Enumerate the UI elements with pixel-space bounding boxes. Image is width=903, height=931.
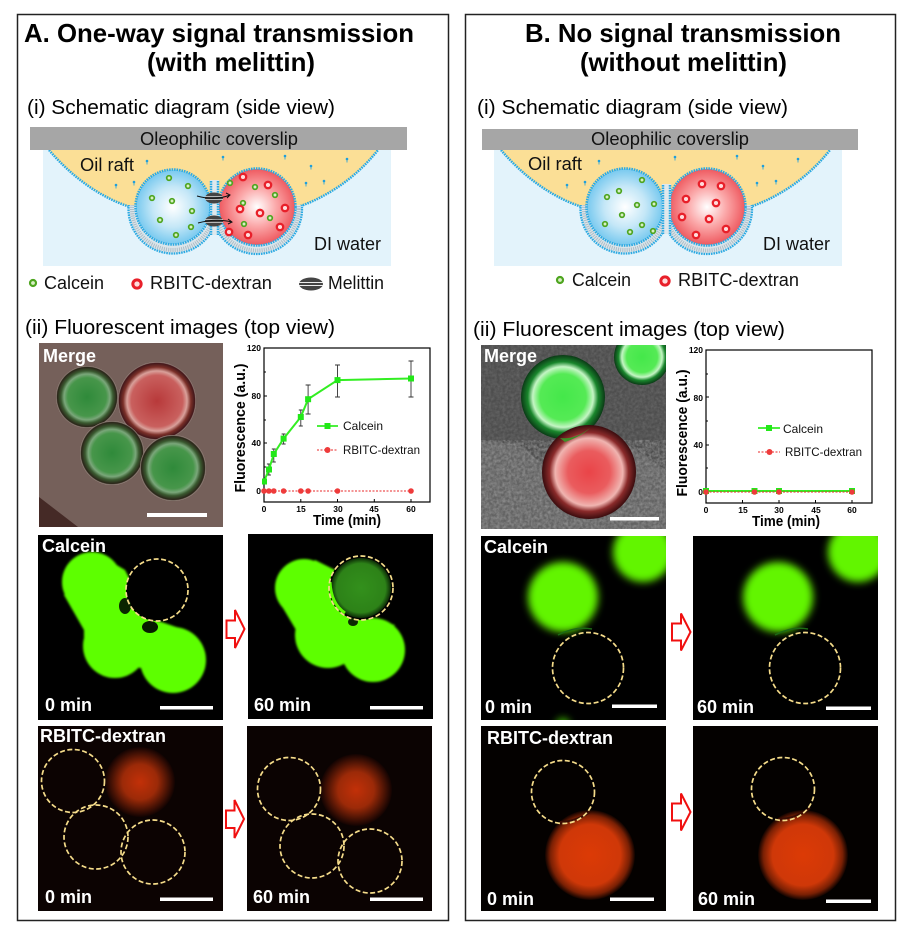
panel B fluorescent heading: (ii) Fluorescent images (top view) bbox=[473, 318, 785, 341]
scale bar bbox=[370, 898, 423, 901]
y tick labels: 40 bbox=[252, 438, 261, 448]
oil tadpoles bbox=[566, 155, 799, 188]
dashed outline bbox=[752, 758, 814, 820]
schematic labels: Oleophilic coverslip bbox=[591, 129, 749, 149]
chart B: fluorescence over time bbox=[674, 345, 872, 530]
merge label: Merge bbox=[484, 346, 537, 366]
chart legend bbox=[758, 422, 862, 459]
RBITC dots bbox=[226, 174, 288, 238]
chart legend: RBITC-dextran bbox=[785, 445, 862, 459]
time label: 60 min bbox=[254, 695, 311, 715]
y tick labels: 120 bbox=[689, 345, 703, 355]
axis titles: Fluorescence (a.u.) bbox=[232, 364, 249, 492]
time label: 0 min bbox=[485, 697, 532, 717]
scale bar bbox=[160, 706, 213, 710]
axis titles: Fluorescence (a.u.) bbox=[674, 370, 691, 496]
melittin pores and arrows bbox=[197, 192, 232, 226]
panel B title bbox=[525, 18, 841, 77]
axis titles: Time (min) bbox=[752, 513, 820, 530]
label: RBITC-dextran bbox=[487, 728, 613, 748]
time label: 60 min bbox=[697, 697, 754, 717]
axis titles bbox=[232, 364, 381, 529]
panel A legend: Melittin bbox=[328, 273, 384, 293]
merge image B bbox=[481, 329, 670, 529]
error bars bbox=[267, 361, 414, 475]
calcein 0 min image A bbox=[38, 535, 223, 720]
axis titles: Time (min) bbox=[313, 512, 381, 529]
y tick labels: 40 bbox=[694, 440, 703, 450]
y tick labels: 80 bbox=[252, 391, 261, 401]
panel A legend: RBITC-dextran bbox=[150, 273, 272, 293]
scale bar bbox=[610, 517, 659, 520]
label: Calcein bbox=[42, 536, 106, 556]
schematic labels: DI water bbox=[763, 234, 830, 254]
scale bar bbox=[147, 513, 207, 517]
x tick labels: 60 bbox=[847, 505, 857, 515]
label: Calcein bbox=[484, 537, 548, 557]
panel A title: (with melittin) bbox=[147, 47, 315, 77]
calcein 0 min image B bbox=[481, 536, 666, 720]
RBITC 60 min image A bbox=[247, 726, 432, 911]
dashed outline bbox=[770, 632, 840, 704]
time label: 0 min bbox=[45, 887, 92, 907]
chart legend: RBITC-dextran bbox=[343, 443, 420, 457]
time label: 0 min bbox=[487, 889, 534, 909]
y tick labels: 120 bbox=[247, 343, 261, 353]
y tick labels bbox=[689, 345, 703, 497]
y tick labels: 0 bbox=[256, 486, 261, 496]
dashed outline bbox=[552, 632, 624, 704]
arrow B calcein bbox=[672, 614, 690, 650]
panel B title: (without melittin) bbox=[580, 47, 787, 77]
x tick labels: 45 bbox=[369, 504, 379, 514]
RBITC 60 min image B bbox=[693, 726, 878, 911]
time label: 60 min bbox=[253, 887, 310, 907]
panel A schematic diagram bbox=[30, 127, 407, 266]
x tick labels: 30 bbox=[774, 505, 784, 515]
panel A schematic heading: (i) Schematic diagram (side view) bbox=[27, 96, 335, 119]
RBITC series bbox=[261, 488, 414, 494]
y tick labels bbox=[247, 343, 261, 496]
panel B legend: Calcein bbox=[572, 270, 631, 290]
merge image A bbox=[39, 343, 223, 527]
scale bar bbox=[160, 898, 213, 901]
arrow A RBITC bbox=[226, 800, 244, 838]
panel A border bbox=[18, 14, 448, 920]
arrow A calcein bbox=[226, 610, 244, 648]
panel A fluorescent heading: (ii) Fluorescent images (top view) bbox=[25, 316, 335, 339]
schematic labels: Oleophilic coverslip bbox=[140, 129, 298, 149]
panel B border bbox=[466, 14, 896, 920]
dashed outline bbox=[532, 760, 594, 824]
scale bar bbox=[610, 898, 654, 901]
panel B schematic diagram bbox=[482, 129, 858, 266]
calcein series bbox=[262, 376, 414, 484]
calcein 60 min image B bbox=[693, 536, 878, 720]
panel B title: B. No signal transmission bbox=[525, 18, 841, 48]
schematic labels bbox=[80, 129, 381, 254]
y tick labels: 80 bbox=[694, 393, 703, 403]
panel B legend bbox=[557, 270, 799, 290]
dashed outlines bbox=[258, 758, 402, 893]
dashed outline bbox=[126, 559, 188, 621]
panel B: no signal transmission bbox=[466, 14, 896, 920]
chart A: fluorescence over time bbox=[232, 343, 430, 529]
dashed outline bbox=[329, 556, 393, 620]
RBITC 0 min image A bbox=[38, 726, 223, 911]
panel A: one-way signal transmission bbox=[18, 14, 448, 920]
calcein dots bbox=[603, 178, 656, 234]
RBITC 0 min image B bbox=[481, 726, 666, 911]
RBITC dots bbox=[679, 181, 729, 238]
chart legend bbox=[317, 419, 420, 457]
arrow B RBITC bbox=[672, 794, 690, 830]
panel B schematic heading: (i) Schematic diagram (side view) bbox=[477, 96, 788, 119]
panel A title: A. One-way signal transmission bbox=[24, 18, 414, 48]
x tick labels bbox=[262, 504, 416, 514]
x tick labels: 15 bbox=[296, 504, 306, 514]
schematic labels: Oil raft bbox=[80, 155, 134, 175]
x tick labels: 60 bbox=[406, 504, 416, 514]
x tick labels: 30 bbox=[333, 504, 343, 514]
panel B legend: RBITC-dextran bbox=[678, 270, 799, 290]
oil tadpoles bbox=[115, 155, 348, 188]
time label: 60 min bbox=[698, 889, 755, 909]
x tick labels: 15 bbox=[738, 505, 748, 515]
x tick labels: 0 bbox=[262, 504, 267, 514]
calcein 60 min image A bbox=[248, 534, 433, 719]
x tick labels bbox=[704, 505, 857, 515]
schematic labels bbox=[528, 129, 830, 254]
panel A legend: Calcein bbox=[44, 273, 104, 293]
calcein series bbox=[703, 488, 855, 494]
label: RBITC-dextran bbox=[40, 726, 166, 746]
time label: 0 min bbox=[45, 695, 92, 715]
dashed outlines bbox=[42, 750, 185, 884]
scale bar bbox=[826, 900, 871, 903]
panel A title bbox=[24, 18, 414, 77]
panel A legend bbox=[30, 273, 384, 293]
calcein dots bbox=[150, 176, 277, 237]
chart legend: Calcein bbox=[343, 419, 383, 433]
axis titles bbox=[674, 370, 820, 530]
RBITC series bbox=[703, 489, 855, 495]
chart legend: Calcein bbox=[783, 422, 823, 436]
x tick labels: 45 bbox=[811, 505, 821, 515]
scale bar bbox=[370, 706, 423, 710]
schematic labels: Oil raft bbox=[528, 154, 582, 174]
merge label: Merge bbox=[43, 346, 96, 366]
y tick labels: 0 bbox=[698, 487, 703, 497]
schematic labels: DI water bbox=[314, 234, 381, 254]
scale bar bbox=[612, 704, 657, 708]
scale bar bbox=[826, 706, 871, 710]
x tick labels: 0 bbox=[704, 505, 709, 515]
